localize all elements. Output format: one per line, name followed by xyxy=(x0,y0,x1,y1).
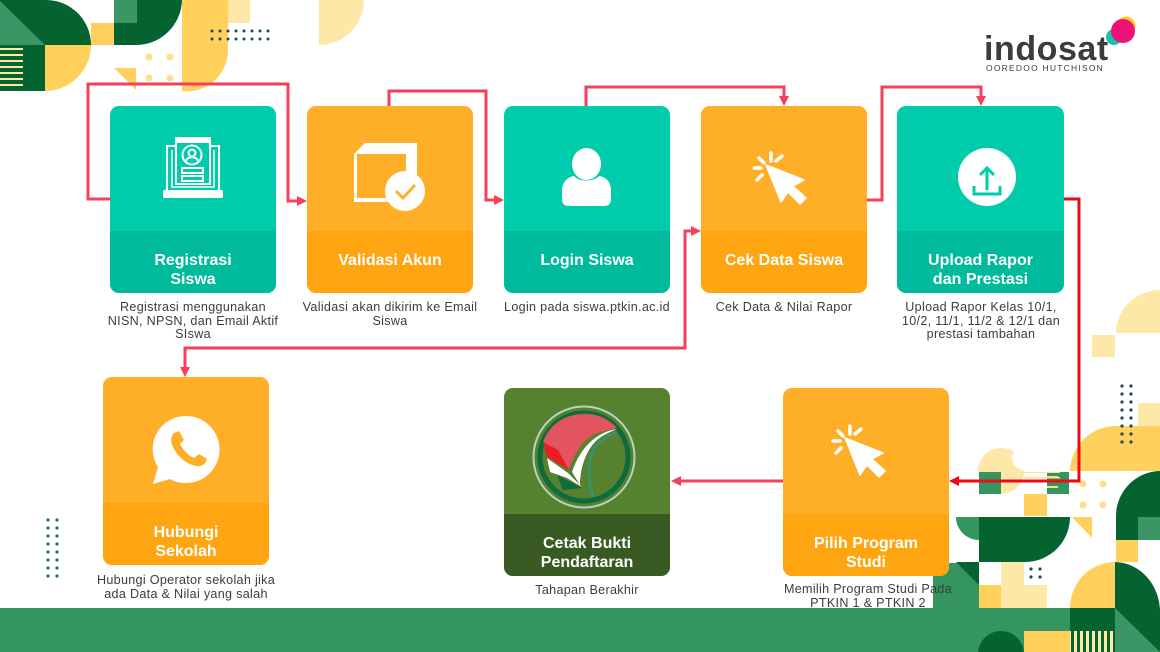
card title: Studi xyxy=(846,554,886,571)
card title: Validasi Akun xyxy=(338,252,442,269)
description: Hubungi Sekolah xyxy=(97,573,275,600)
description: Hubungi Sekolah: Hubungi Operator sekolah jika xyxy=(97,573,275,587)
card title xyxy=(110,231,276,293)
logo tagline: OOREDOO HUTCHISON xyxy=(986,63,1104,73)
description: Hubungi Sekolah: ada Data & Nilai yang salah xyxy=(104,586,268,600)
logo wordmark: indosat xyxy=(984,30,1109,68)
card title: Cetak Bukti xyxy=(543,535,631,552)
card: Pilih Program Studi xyxy=(783,388,949,576)
card title xyxy=(897,231,1064,293)
description: Registrasi Siswa: NISN, NPSN, dan Email Aktif xyxy=(108,314,278,328)
card: Login Siswa xyxy=(504,106,670,293)
icon: PTKIN emblem xyxy=(532,406,636,508)
card title: Registrasi xyxy=(154,252,232,269)
description: Pilih Program Studi: PTKIN 1 & PTKIN 2 xyxy=(810,596,926,610)
card title: Cek Data Siswa xyxy=(725,252,843,269)
card title: Upload Rapor xyxy=(928,252,1033,269)
description: Upload Rapor: prestasi tambahan xyxy=(927,327,1035,341)
card title: Hubungi xyxy=(154,524,218,541)
card title: Pendaftaran xyxy=(541,554,633,571)
card title: Login Siswa xyxy=(540,252,634,269)
card: Registrasi Siswa xyxy=(110,106,276,293)
icon: laptop with profile form xyxy=(163,137,223,198)
description: Registrasi Siswa: SIswa xyxy=(175,327,211,341)
card title: Sekolah xyxy=(155,543,217,560)
card title xyxy=(504,514,670,576)
description: Cek Data Siswa: Cek Data & Nilai Rapor xyxy=(716,300,852,314)
description: Upload Rapor: 10/2, 11/1, 11/2 & 12/1 dan xyxy=(902,314,1060,328)
card title xyxy=(504,231,670,293)
description: Registrasi Siswa: Registrasi menggunakan xyxy=(120,300,266,314)
description: Upload Rapor: Upload Rapor Kelas 10/1, xyxy=(905,300,1057,314)
description: Registrasi Siswa xyxy=(108,300,278,341)
description: Pilih Program Studi xyxy=(784,582,952,610)
card title: Pilih Program xyxy=(814,535,918,552)
logo mark xyxy=(1106,16,1136,45)
description: Validasi Akun: Validasi akan dikirim ke Email xyxy=(303,300,477,314)
description: Validasi Akun: Siswa xyxy=(372,314,408,328)
icon: cursor click xyxy=(752,151,807,205)
icon: whatsapp xyxy=(152,416,220,484)
card: Hubungi Sekolah xyxy=(103,377,269,565)
logo: indosat ooredoo hutchison xyxy=(984,16,1136,73)
card title xyxy=(783,514,949,576)
card: Cetak Bukti Pendaftaran xyxy=(504,388,670,576)
card title xyxy=(103,503,269,565)
description: Validasi Akun xyxy=(302,300,477,328)
card: Validasi Akun xyxy=(307,106,473,293)
card: Cek Data Siswa xyxy=(701,106,867,293)
description: Pilih Program Studi: Memilih Program Studi Pada xyxy=(784,582,952,596)
icon: window with check xyxy=(354,143,425,211)
icon: user xyxy=(562,148,611,206)
card title: Siswa xyxy=(170,271,216,288)
icon: cursor click xyxy=(831,424,886,478)
card title xyxy=(307,231,473,293)
card title xyxy=(701,231,867,293)
icon: upload xyxy=(958,148,1016,206)
description: Upload Rapor xyxy=(902,300,1060,341)
description: Login Siswa: Login pada siswa.ptkin.ac.id xyxy=(504,300,670,314)
card title: dan Prestasi xyxy=(933,271,1028,288)
card: Upload Rapor dan Prestasi xyxy=(897,106,1064,293)
description: Cetak Bukti: Tahapan Berakhir xyxy=(535,583,639,597)
